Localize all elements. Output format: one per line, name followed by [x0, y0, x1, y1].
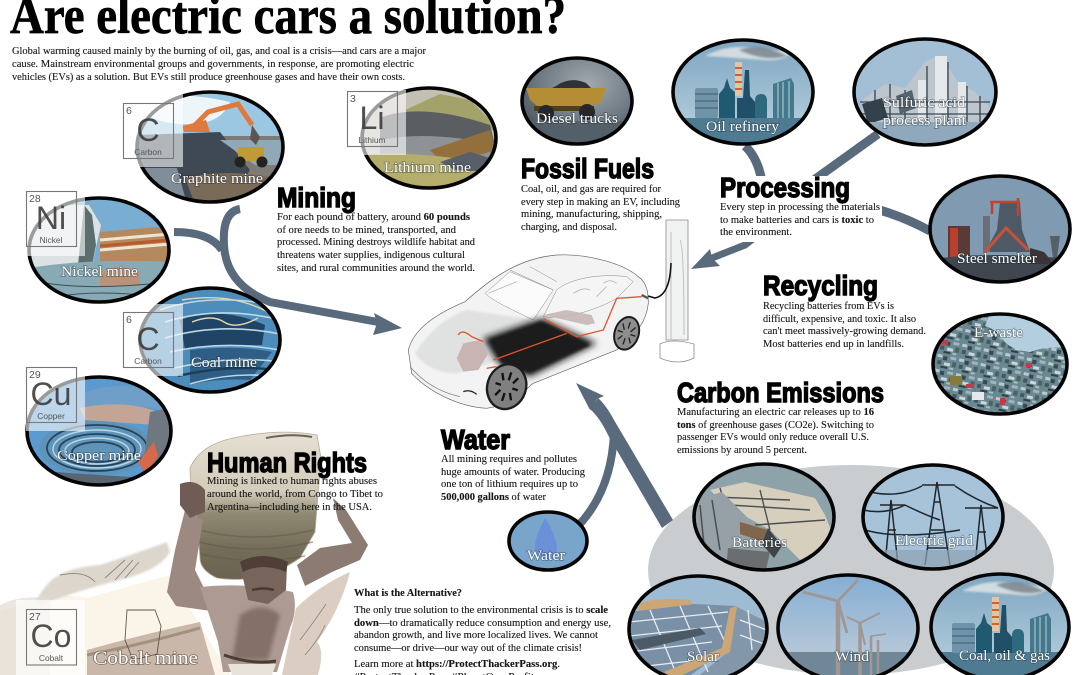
panel: batteries — [694, 464, 835, 571]
text block: carbon emissions — [677, 406, 875, 456]
text block: fossil fuels: Coal, oil, and gas are required for — [521, 183, 661, 195]
panel: steel smelter — [930, 176, 1072, 284]
text block: mining: threatens water supplies, indigenous cultural — [277, 249, 465, 261]
panel: carbon sources backdrop — [648, 465, 1054, 675]
element tile: carbon — [124, 104, 174, 158]
panel: mining — [277, 182, 476, 274]
label: electric grid: Electric grid — [895, 533, 974, 549]
text block: mining — [277, 211, 476, 274]
panel: e-waste — [933, 313, 1067, 415]
text block: carbon emissions: passenger EVs would only reduce overall U.S. — [677, 431, 869, 443]
text block: alternative: consume—or drive—our way out of the climate crisis! — [354, 642, 582, 654]
text block: human rights: Argentina—including here in the USA. — [207, 501, 372, 513]
text block: water: huge amounts of water. Producing — [441, 466, 586, 478]
charging cable — [458, 297, 642, 368]
element tile: nickel: Nickel — [40, 235, 63, 245]
panel: water — [509, 512, 587, 572]
intro text: cause. Mainstream environmental groups and governments, in response, are promoting electric — [12, 58, 414, 70]
element tile: carbon — [124, 312, 174, 368]
panel: fossil fuels — [521, 153, 681, 233]
text block: human rights — [207, 475, 383, 513]
text block: carbon emissions: emissions by around 5 percent. — [677, 444, 807, 456]
element tile: cobalt: Co — [31, 618, 71, 654]
text block: alternative: The only true solution to the environmental crisis is to scale — [354, 604, 608, 616]
heading: carbon emissions: Carbon Emissions — [677, 377, 884, 408]
text block: fossil fuels — [521, 183, 681, 233]
label: lithium mine: Lithium mine — [384, 160, 471, 176]
element tile: copper: Copper — [37, 411, 65, 421]
label: diesel trucks: Diesel trucks — [536, 111, 618, 127]
panel: wind — [778, 575, 920, 675]
text block: alternative: Learn more at https://ProtectThackerPass.org. — [354, 658, 560, 670]
label: water: Water — [527, 548, 565, 564]
element tile: carbon: Carbon — [134, 147, 162, 157]
panel: cobalt mine tile — [16, 600, 198, 675]
text block: alternative: abandon growth, and live more localized lives. We cannot — [354, 629, 598, 641]
heading: recycling: Recycling — [763, 270, 878, 301]
panel: nickel mine — [26, 194, 170, 304]
intro text: Global warming caused mainly by the burning of oil, gas, and coal is a crisis—and cars are a major — [12, 45, 426, 57]
label: sulfuric acid process plant — [883, 95, 967, 129]
label: cobalt mine: Cobalt mine — [93, 648, 198, 669]
text block: human rights: around the world, from Congo to Tibet to — [207, 488, 383, 500]
heading: mining: Mining — [277, 182, 356, 213]
text block: processing: Every step in processing the materials — [720, 201, 880, 213]
label: wind: Wind — [835, 649, 870, 665]
element tile: carbon: 6 — [126, 314, 132, 326]
element tile: cobalt — [26, 610, 76, 665]
element tile: copper — [26, 368, 76, 422]
element tile: nickel: 28 — [29, 193, 41, 205]
label: graphite mine: Graphite mine — [171, 171, 263, 187]
panel: carbon emissions — [677, 377, 884, 456]
label: sulfuric acid process plant: Sulfuric acid — [883, 95, 966, 111]
label: coal mine: Coal mine — [191, 355, 257, 371]
element tile: cobalt: Cobalt — [39, 653, 64, 663]
panel: graphite mine — [130, 92, 283, 204]
text block: mining: sites, and rural communities around the world. — [277, 262, 475, 274]
label: steel smelter: Steel smelter — [957, 251, 1037, 267]
element tile: nickel — [26, 192, 76, 246]
panel: coal mine — [130, 288, 280, 392]
element tile: lithium: Lithium — [358, 135, 386, 145]
panel: diesel trucks — [522, 58, 632, 144]
text block: recycling: Recycling batteries from EVs is — [763, 300, 894, 312]
panel: oil refinery — [673, 40, 813, 146]
heading: processing: Processing — [720, 172, 850, 203]
panel: what is the alternative — [354, 587, 611, 675]
text block: water: All mining requires and pollutes — [441, 453, 577, 465]
text block: recycling: difficult, expensive, and toxic. It also — [763, 313, 916, 325]
panel: solar — [629, 576, 767, 675]
battery pack — [483, 318, 597, 377]
element tile: lithium — [348, 92, 398, 146]
text block: carbon emissions: tons of greenhouse gases (CO2e). Switching to — [677, 419, 874, 431]
element tile: cobalt: 27 — [29, 611, 41, 623]
intro text: vehicles (EVs) as a solution. But EVs still produce greenhouse gases and have their own costs. — [12, 71, 405, 83]
arrow: carbon emissions and water to car — [576, 383, 673, 528]
illustration: electric car at charger — [408, 220, 694, 414]
label: nickel mine: Nickel mine — [61, 264, 138, 280]
element tile: lithium: 3 — [350, 93, 356, 105]
text block: water: one ton of lithium requires up to — [441, 478, 578, 490]
label: coal, oil and gas: Coal, oil & gas — [959, 648, 1050, 664]
text block: water — [441, 453, 586, 503]
text block: alternative: down—to dramatically reduce consumption and energy use, — [354, 617, 611, 629]
text block: human rights: Mining is linked to human rights abuses — [207, 475, 377, 487]
label: e-waste: E-waste — [974, 325, 1023, 341]
text block: processing: the environment. — [720, 226, 792, 238]
text block: alternative — [354, 604, 611, 675]
arrow: mining to car — [174, 209, 402, 335]
heading: alternative: What is the Alternative? — [354, 587, 462, 599]
heading: fossil fuels: Fossil Fuels — [521, 153, 654, 184]
text block: recycling: can't meet massively-growing demand. — [763, 325, 926, 337]
panel: recycling — [763, 270, 926, 350]
label: oil refinery: Oil refinery — [706, 119, 780, 135]
element tile: carbon: C — [136, 112, 160, 148]
element tile: nickel: Ni — [36, 200, 66, 236]
text block: carbon emissions: Manufacturing an electric car releases up to 16 — [677, 406, 875, 418]
label: batteries: Batteries — [732, 535, 787, 551]
text block: processing: to make batteries and cars is toxic to — [720, 214, 874, 226]
element tile: copper: 29 — [29, 369, 41, 381]
text block: water: 500,000 gallons of water — [441, 491, 546, 503]
label: sulfuric acid process plant: process plant — [883, 113, 967, 129]
element tile: carbon: 6 — [126, 105, 132, 117]
text block: recycling: Most batteries end up in landfills. — [763, 338, 904, 350]
panel: lithium mine — [350, 88, 500, 190]
text block: fossil fuels: charging, and disposal. — [521, 221, 617, 233]
panel: processing — [718, 172, 882, 242]
text block: fossil fuels: every step in making an EV, including — [521, 196, 681, 208]
illustration: cobalt miner carrying sack — [0, 432, 368, 675]
panel: sulfuric acid process plant — [854, 39, 996, 146]
rear wheel — [610, 314, 643, 353]
label: copper mine: Copper mine — [57, 448, 141, 464]
icon: charging post — [648, 220, 694, 362]
icon: water drop — [535, 518, 557, 560]
text block: mining: of ore needs to be mined, transported, and — [277, 224, 457, 236]
text block: fossil fuels: mining, manufacturing, shipping, — [521, 208, 662, 220]
element tile: carbon: C — [136, 321, 160, 357]
element tile: copper: Cu — [31, 376, 71, 412]
arrow: processing to charger — [691, 134, 930, 269]
text block: mining: For each pound of battery, around 60 pounds — [277, 211, 470, 223]
text block: recycling — [763, 300, 926, 350]
text block: mining: processed. Mining destroys wildlife habitat and — [277, 236, 476, 248]
front wheel — [481, 359, 532, 414]
element tile: lithium: Li — [360, 100, 384, 136]
panel: copper mine — [26, 372, 171, 490]
panel: human rights — [207, 447, 383, 513]
intro text — [12, 45, 426, 83]
heading: human rights: Human Rights — [207, 447, 367, 478]
text block: processing — [720, 201, 880, 238]
heading: water: Water — [441, 424, 510, 455]
panel: water text — [441, 424, 586, 503]
panel: electric grid — [863, 465, 1004, 570]
element tile: carbon: Carbon — [134, 356, 162, 366]
label: solar: Solar — [687, 649, 719, 665]
panel: coal, oil and gas — [931, 574, 1070, 675]
